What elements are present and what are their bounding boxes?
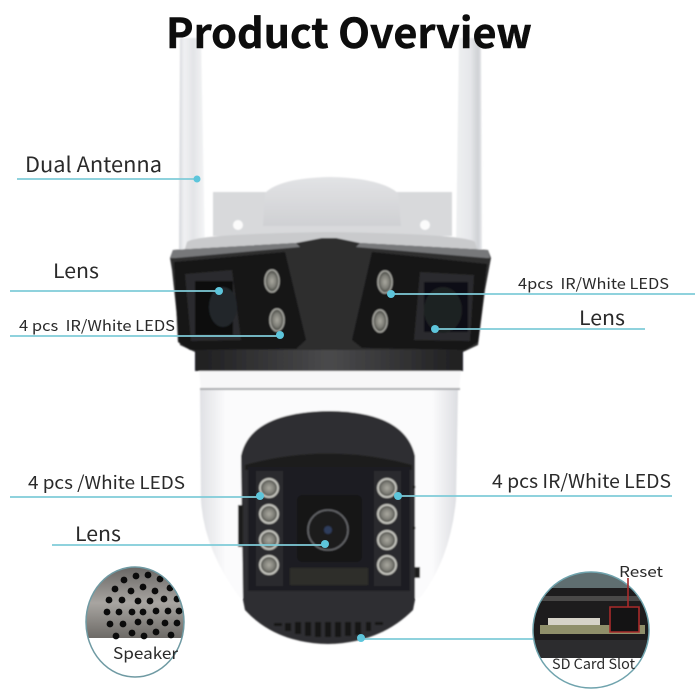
- right lens housing: [352, 252, 487, 350]
- left lens housing: [174, 252, 306, 350]
- callout: dual antenna: Dual Antenna: [25, 149, 162, 179]
- reset label: Reset: [619, 561, 663, 582]
- speaker label: Speaker: [113, 640, 179, 664]
- vent slots: [274, 622, 383, 637]
- left antenna: [179, 38, 205, 250]
- sd card label: SD Card Slot: [552, 653, 636, 674]
- reset marker: [610, 578, 639, 632]
- callout: left lens: [10, 255, 223, 295]
- callout: right lens: [431, 302, 645, 333]
- white ring: [199, 371, 461, 389]
- speaker inset: [85, 560, 185, 677]
- lens module: [297, 495, 362, 562]
- callout: front right LEDs: 4 pcs IR/White LEDS: [492, 467, 671, 494]
- callout: right lens: Lens: [579, 302, 625, 331]
- callout: front lens: Lens: [75, 518, 121, 547]
- right lens: [414, 272, 474, 341]
- inner panel: [248, 467, 410, 591]
- callout: front left LEDs: [10, 469, 264, 500]
- dark front shell: [241, 411, 415, 644]
- callout: vent to SD slot: [357, 634, 533, 642]
- callout: front left LEDs: 4 pcs /White LEDS: [28, 469, 185, 495]
- front lens: [308, 510, 348, 550]
- title: Product Overview: [166, 0, 532, 60]
- white body: [200, 390, 458, 598]
- underside band: [195, 350, 463, 371]
- side ports: [238, 486, 420, 578]
- callout: left IR LEDs: 4 pcs IR/White LEDS: [19, 315, 175, 336]
- dome cap: [263, 177, 401, 226]
- speaker holes: [104, 572, 182, 639]
- callout: front right LEDs: [394, 467, 672, 500]
- wall bracket: [213, 192, 452, 236]
- right antenna: [456, 38, 482, 250]
- callout: right IR LEDs: 4pcs IR/White LEDS: [518, 273, 669, 294]
- band LEDs: [265, 270, 392, 332]
- callout: dual antenna: [17, 149, 200, 182]
- callout: right IR LEDs: [387, 273, 695, 298]
- callout: front lens: [52, 518, 329, 548]
- bracket screws: [233, 220, 430, 230]
- band top highlight: [170, 243, 490, 258]
- front LEDs: [260, 479, 396, 574]
- camera illustration: [170, 38, 491, 644]
- LED strips: [256, 471, 283, 586]
- callout: left IR LEDs: [10, 315, 284, 339]
- left lens: [185, 270, 241, 341]
- callout: left lens: Lens: [53, 255, 99, 284]
- collar: [184, 232, 478, 252]
- SD card slot inset: [530, 561, 663, 688]
- dark camera band: [170, 238, 491, 371]
